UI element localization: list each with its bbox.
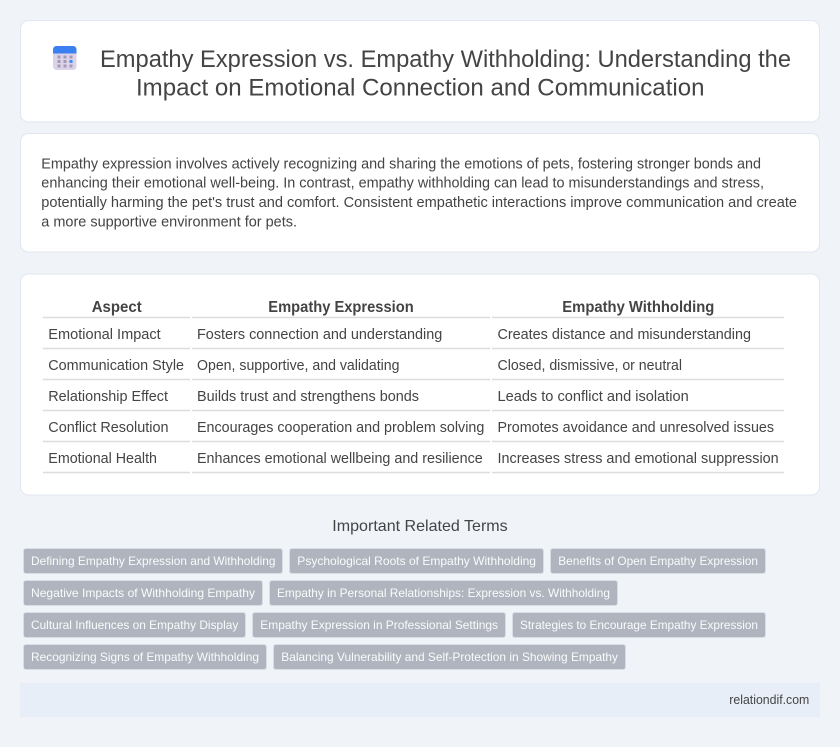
tag: Negative Impacts of Withholding Empathy [31,586,255,600]
row: emotional impact: Fosters connection and understanding [197,327,442,343]
intro text: potentially harming the pet's trust and comfort. Consistent empathetic interactions improve communication and create [41,195,797,211]
panel: title header [20,20,820,122]
tag [274,644,626,670]
intro text: Empathy expression involves actively recognizing and sharing the emotions of pets, fostering stronger bonds and [41,156,761,172]
title [100,46,791,102]
tag: Empathy Expression in Professional Settings [260,618,498,632]
tag [24,548,282,574]
table header: Empathy Expression [268,299,414,316]
tag: Empathy in Personal Relationships: Expression vs. Withholding [277,586,610,600]
tag [270,580,618,606]
tag: Benefits of Open Empathy Expression [558,554,758,568]
footer [20,683,820,717]
row: relationship effect: Builds trust and strengthens bonds [197,389,419,405]
row: relationship effect: Relationship Effect [48,389,168,405]
panel: introduction [20,134,820,252]
tag: Cultural Influences on Empathy Display [31,618,238,632]
row: emotional health: Enhances emotional wellbeing and resilience [197,451,483,467]
tag: Recognizing Signs of Empathy Withholding [31,650,259,664]
panel: comparison table [20,274,820,495]
tag: Defining Empathy Expression and Withholding [31,554,276,568]
intro text: a more supportive environment for pets. [41,214,297,230]
heading: important related terms: Important Related Terms [332,518,508,535]
row: emotional health: Emotional Health [48,451,157,467]
tag [24,580,262,606]
row: communication style: Open, supportive, and validating [197,358,400,374]
row: emotional health [43,451,784,472]
tag [24,644,266,670]
title: Impact on Emotional Connection and Communication [136,74,704,102]
row: emotional impact [43,327,784,348]
tag [512,612,766,638]
title: Empathy Expression vs. Empathy Withholding: Understanding the [100,46,791,73]
tag: Balancing Vulnerability and Self-Protection in Showing Empathy [281,650,618,664]
table header: Empathy Withholding [562,299,714,316]
row: communication style: Communication Style [48,358,184,374]
row: conflict resolution: Encourages cooperation and problem solving [197,420,484,436]
tag [550,548,766,574]
tag [252,612,506,638]
table header: Aspect [92,299,142,316]
row: emotional health: Increases stress and emotional suppression [498,451,779,467]
tag [24,612,246,638]
intro text [41,156,797,230]
tag: Psychological Roots of Empathy Withholding [297,554,536,568]
row: conflict resolution [43,420,784,442]
row: communication style [43,358,784,380]
icon: calendar [53,46,76,70]
row: emotional impact: Emotional Impact [48,327,161,343]
intro text: enhancing their emotional well-being. In contrast, empathy withholding can lead to misunderstandings and stress, [41,176,764,192]
table header [43,299,784,318]
row: relationship effect: Leads to conflict and isolation [498,389,689,405]
row: relationship effect [43,389,784,410]
row: communication style: Closed, dismissive, or neutral [498,358,682,374]
tag [290,548,544,574]
row: conflict resolution: Promotes avoidance and unresolved issues [498,420,774,436]
row: conflict resolution: Conflict Resolution [48,420,168,436]
footer site name: relationdif.com [729,692,809,707]
tag: Strategies to Encourage Empathy Expression [520,618,758,632]
related term tags [24,548,766,670]
row: emotional impact: Creates distance and misunderstanding [498,327,751,343]
